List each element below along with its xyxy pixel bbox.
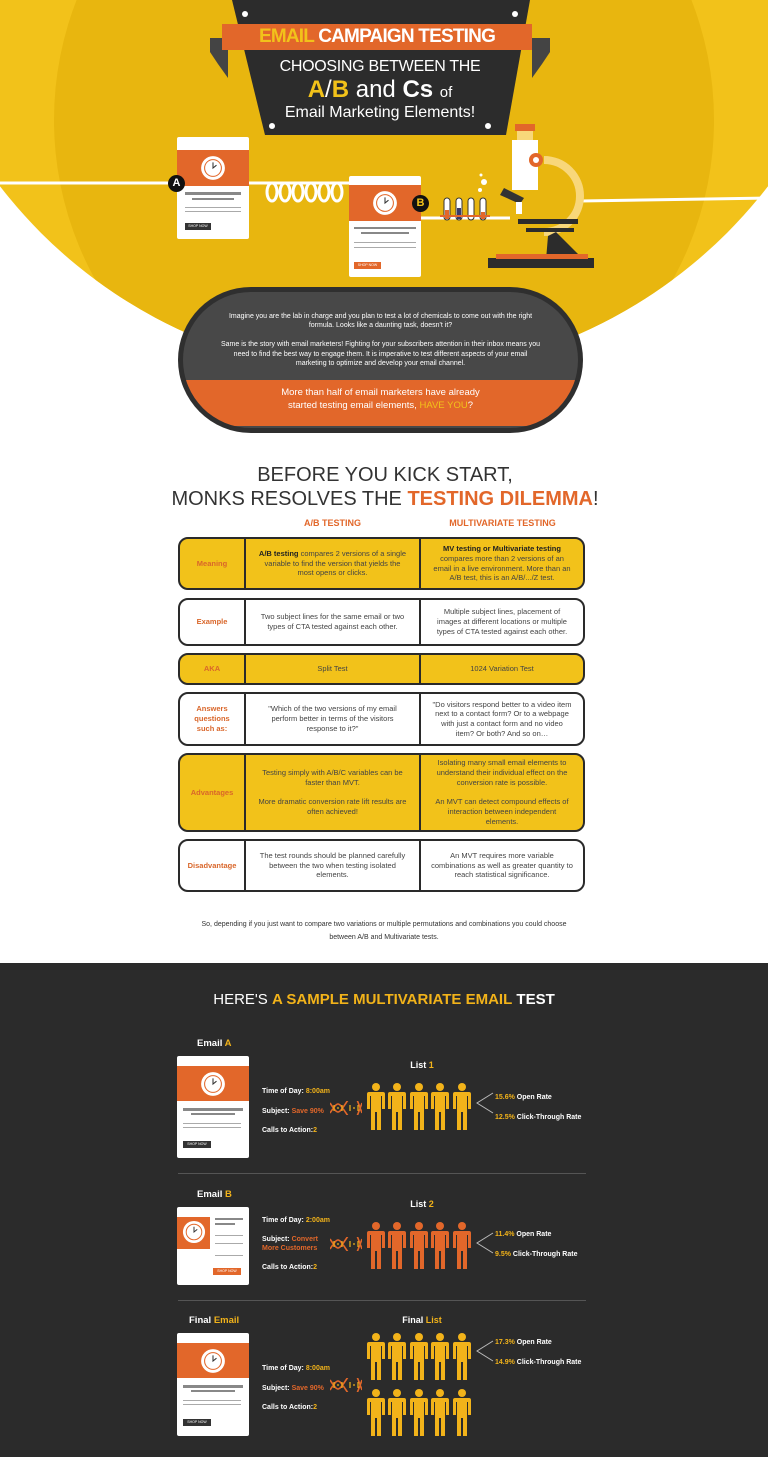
label B <box>412 195 429 212</box>
intro text <box>221 312 540 367</box>
attributes: Time of Day: 2:00am <box>262 1217 330 1224</box>
section heading <box>171 464 599 510</box>
stats: 9.5% Click-Through Rate <box>495 1250 577 1258</box>
orange callout <box>183 380 578 426</box>
title banner <box>210 0 550 135</box>
row: meaning <box>178 537 585 590</box>
comparison table <box>178 537 585 892</box>
stats <box>495 1094 582 1120</box>
stats: 17.3% Open Rate <box>495 1339 552 1346</box>
email mockup: SHOP NOW <box>187 1142 207 1146</box>
subtitle <box>280 58 480 121</box>
row: example: Multiple subject lines, placement of images at different locations or multiple types of CTA tested against each other. <box>437 607 567 636</box>
email mockup <box>177 1333 249 1436</box>
label A: A <box>173 177 180 189</box>
row: aka: AKA <box>204 664 220 673</box>
conclusion text: So, depending if you just want to compare two variations or multiple permutations and combinations you could choose between A/B and Multivariate tests. <box>202 921 566 941</box>
icon: test tubes and microscope <box>440 124 594 268</box>
row: aka: Split Test <box>317 664 348 673</box>
hero background <box>0 0 768 334</box>
label B: B <box>417 197 424 209</box>
row: answers <box>178 692 585 746</box>
attributes: Calls to Action:2 <box>262 1127 317 1134</box>
row: email B: Calls to Action:2 <box>262 1264 317 1271</box>
row: email B <box>177 1189 578 1285</box>
row: disadvantage <box>178 839 585 892</box>
coil <box>266 184 344 202</box>
section heading: BEFORE YOU KICK START, <box>257 464 513 486</box>
row: meaning: A/B testing compares 2 versions of a single variable to find the version that yields the most opens or clicks. <box>259 549 406 577</box>
row: advantages: An MVT can detect compound effects of interaction between independent elements. <box>435 797 569 826</box>
subtitle: CHOOSING BETWEEN THE <box>280 58 480 75</box>
attributes <box>262 1364 330 1411</box>
attributes <box>262 1088 330 1134</box>
dark section <box>0 963 768 1457</box>
email mockup <box>177 1056 249 1158</box>
row: meaning: Meaning <box>197 559 227 568</box>
attributes: Time of Day: 8:00am <box>262 1088 330 1095</box>
stats <box>495 1339 582 1366</box>
email mockup B hero: SHOP NOW <box>358 263 377 267</box>
list 2 people: List 2 <box>410 1199 434 1209</box>
stats: 11.4% Open Rate <box>495 1231 551 1238</box>
stats: 12.5% Click-Through Rate <box>495 1114 581 1120</box>
orange callout: More than half of email marketers have already <box>281 387 480 398</box>
list 1 people: List 1 <box>410 1060 434 1070</box>
row: email A: Email A <box>197 1038 232 1049</box>
email mockup B hero <box>349 176 421 277</box>
intro text: Imagine you are the lab in charge and you plan to test a lot of chemicals to come out with the right formula. Looks like a daunting task, doesn't it? <box>229 313 532 329</box>
row: disadvantage: An MVT requires more variable combinations as well as greater quantity to reach statistical significance. <box>431 851 573 879</box>
row: example <box>178 598 585 646</box>
stats: 14.9% Click-Through Rate <box>495 1358 581 1366</box>
column headers: A/B TESTING <box>304 518 361 528</box>
stats <box>495 1231 578 1258</box>
row: aka <box>178 653 585 685</box>
row: example: Two subject lines for the same email or two types of CTA tested against each other. <box>261 612 404 631</box>
stats: 15.6% Open Rate <box>495 1094 552 1101</box>
attributes: Subject: Save 90% <box>262 1108 324 1114</box>
row: example: Example <box>197 617 227 626</box>
row: advantages: Testing simply with A/B/C variables can be faster than MVT. <box>262 768 403 787</box>
row: final email: Final Email <box>189 1315 239 1326</box>
email mockup A hero: SHOP NOW <box>188 224 208 228</box>
attributes: Calls to Action:2 <box>262 1404 317 1411</box>
intro text: Same is the story with email marketers! Fighting for your subscribers attention in their inbox means you need to find the best way to engage them. It is imperative to test different aspects of your email marketing to optimize and develop your email channel. <box>221 341 540 367</box>
row: meaning: compares more than 2 versions of an email in a live environment. More than an A/B test, this is an A/B/.../Z test. <box>433 554 571 582</box>
email mockup <box>177 1207 249 1285</box>
row: advantages: Advantages <box>191 788 233 797</box>
intro pill panel <box>178 287 583 433</box>
title text: EMAIL CAMPAIGN TESTING <box>259 26 495 47</box>
row: meaning: MV testing or Multivariate testing <box>443 544 561 553</box>
column headers: MULTIVARIATE TESTING <box>449 518 556 528</box>
email mockup: SHOP NOW <box>217 1269 237 1273</box>
row: email A <box>177 1038 582 1158</box>
row: email B: Email B <box>197 1189 232 1200</box>
row: aka: 1024 Variation Test <box>470 664 534 673</box>
row: disadvantage: The test rounds should be planned carefully between the two when testing isolated elements. <box>260 851 405 879</box>
row: answers: "Do visitors respond better to a video item next to a contact form? Or to a webpage with just a contact form and no video item? Or both? And so on… <box>432 700 571 738</box>
subtitle: A/B and Cs of <box>308 76 452 103</box>
attributes: Subject: Save 90% <box>262 1384 324 1392</box>
row: advantages: More dramatic conversion rate lift results are often achieved! <box>258 797 406 816</box>
row: email B: Subject: Convert <box>262 1236 318 1243</box>
label A <box>168 175 185 192</box>
email mockup: SHOP NOW <box>187 1420 207 1424</box>
row: disadvantage: Disadvantage <box>188 861 236 870</box>
row: final email <box>177 1315 582 1436</box>
subtitle: Email Marketing Elements! <box>285 104 475 121</box>
row: answers: "Which of the two versions of my email perform better in terms of the visitors response to it?" <box>268 704 397 733</box>
row: advantages <box>178 753 585 832</box>
attributes: Time of Day: 8:00am <box>262 1365 330 1372</box>
section 3 heading: HERE'S A SAMPLE MULTIVARIATE EMAIL TEST <box>213 991 555 1008</box>
email mockup A hero <box>177 137 249 239</box>
row: answers: Answers questions such as: <box>194 704 230 733</box>
final list people: Final List <box>402 1315 442 1325</box>
orange callout: started testing email elements, HAVE YOU? <box>288 400 473 411</box>
section heading: MONKS RESOLVES THE TESTING DILEMMA! <box>171 488 599 510</box>
column headers <box>304 518 556 528</box>
row: email B: More Customers <box>262 1245 317 1252</box>
row: advantages: Isolating many small email elements to understand their individual effect on the conversion rate is possible. <box>437 758 567 787</box>
